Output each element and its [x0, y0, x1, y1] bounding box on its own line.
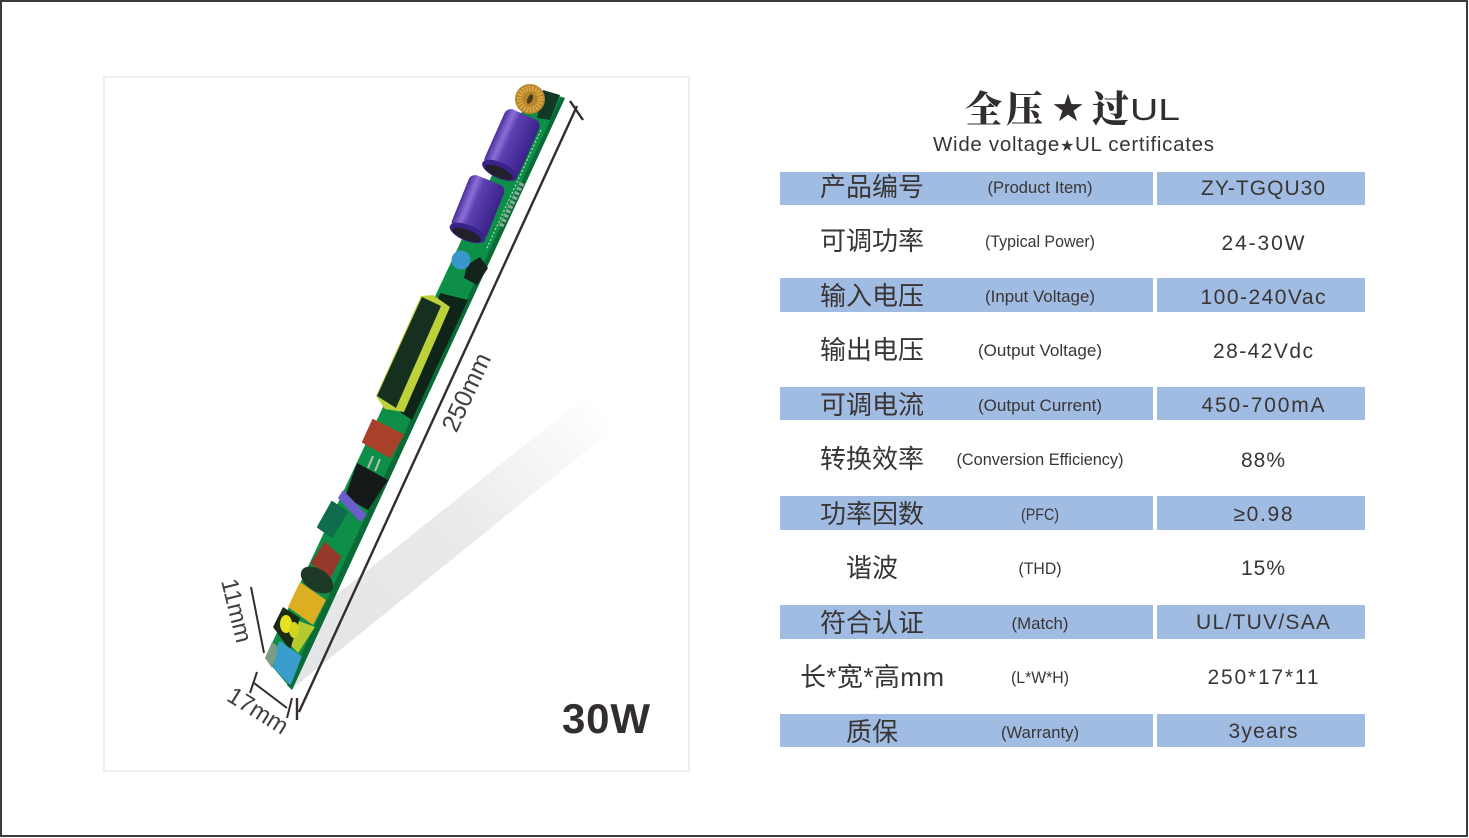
- row: dimensions: 长*宽*高mm: [800, 662, 944, 692]
- row: output voltage: 28-42Vdc: [1213, 340, 1313, 363]
- row: PFC: 功率因数: [820, 499, 924, 529]
- heading: [933, 79, 1214, 156]
- row: input voltage: 输入电压: [820, 281, 924, 311]
- row: THD: (THD): [1018, 559, 1062, 578]
- row: conversion efficiency: 转换效率: [820, 444, 924, 474]
- yellow-black inductor: [273, 607, 315, 653]
- row: output voltage: (Output Voltage): [978, 341, 1102, 360]
- heading Chinese: 全压: [965, 79, 1043, 133]
- panel: product photo: [104, 77, 689, 771]
- row: warranty: [780, 714, 1365, 747]
- row: conversion efficiency: (Conversion Efficiency): [956, 450, 1124, 469]
- grey pad corner: [265, 642, 280, 668]
- silkscreen text strip: [500, 183, 522, 228]
- dimension line: height: [251, 587, 264, 653]
- row: typical power: 24-30W: [1222, 232, 1305, 255]
- row: input voltage: 100-240Vac: [1200, 286, 1326, 309]
- floor shadow: [293, 393, 612, 688]
- row: THD: 15%: [1241, 557, 1285, 580]
- spec table: [780, 172, 1365, 747]
- row: dimensions: 250*17*11: [1208, 666, 1318, 689]
- blue safety capacitor: [275, 643, 300, 683]
- row: warranty: 质保: [846, 717, 898, 747]
- row: match: UL/TUV/SAA: [1196, 611, 1330, 634]
- dark patch by toroid: [537, 90, 560, 120]
- panel border: [104, 77, 689, 771]
- row: input voltage: (Input Voltage): [985, 287, 1095, 306]
- red film capacitor bottom: [312, 543, 340, 577]
- row: output current: 450-700mA: [1202, 394, 1324, 417]
- green capacitor: [318, 502, 347, 537]
- dimension label: 11mm: 11mm: [215, 576, 257, 645]
- row: match: (Match): [1012, 614, 1068, 633]
- dark area beside transformer: [400, 293, 468, 420]
- board surface: [265, 88, 565, 690]
- row: typical power: (Typical Power): [985, 232, 1095, 251]
- yellow box capacitor: [288, 582, 326, 625]
- row: match: [780, 605, 1365, 639]
- row: product item: ZY-TGQU30: [1201, 177, 1325, 200]
- row: conversion efficiency: 88%: [1241, 449, 1285, 472]
- row: typical power: 可调功率: [820, 226, 924, 256]
- row: PFC: [780, 496, 1365, 530]
- toroid inductor: [515, 84, 545, 114]
- heading Chinese character: 过: [1092, 79, 1129, 133]
- dimension line: width: [250, 672, 292, 718]
- dimension line: length: [297, 101, 583, 720]
- row: product item: 产品编号: [820, 172, 924, 202]
- board side edge: [287, 97, 565, 690]
- row: typical power: [820, 226, 1305, 256]
- MOSFET: [345, 456, 388, 510]
- row: output current: (Output Current): [978, 396, 1102, 415]
- red film capacitor top: [363, 420, 403, 457]
- row: dimensions: (L*W*H): [1011, 668, 1069, 687]
- blue disc capacitor small: [452, 250, 470, 270]
- silkscreen line: [486, 130, 541, 250]
- row: THD: [846, 553, 1285, 583]
- row: PFC: ≥0.98: [1234, 503, 1292, 526]
- row: warranty: (Warranty): [1001, 723, 1079, 742]
- row: output voltage: 输出电压: [820, 335, 924, 365]
- small black part: [464, 257, 488, 285]
- row: conversion efficiency: [820, 444, 1285, 474]
- purple resistor: [338, 490, 367, 522]
- row: output current: [780, 387, 1365, 420]
- row: product item: (Product Item): [988, 178, 1092, 197]
- subtitle: Wide voltage★UL certificates: [933, 133, 1214, 156]
- heading star: ★: [1051, 86, 1085, 130]
- capacitor 1: [479, 107, 542, 185]
- wattage label: 30W: [562, 695, 650, 742]
- row: PFC: (PFC): [1021, 505, 1059, 524]
- transformer: [376, 295, 450, 412]
- row: match: 符合认证: [820, 608, 924, 638]
- row: output current: 可调电流: [820, 390, 924, 420]
- dimension label: 17mm: 17mm: [222, 682, 293, 740]
- row: output voltage: [820, 335, 1313, 365]
- dimension label: 250mm: 250mm: [436, 349, 497, 436]
- heading UL: UL: [1130, 92, 1180, 127]
- choke: [296, 561, 338, 599]
- row: THD: 谐波: [846, 553, 898, 583]
- row: input voltage: [780, 278, 1365, 312]
- LED driver board: [265, 84, 565, 690]
- row: warranty: 3years: [1228, 720, 1298, 743]
- capacitor 2: [447, 173, 506, 247]
- row: product item: [780, 172, 1365, 205]
- row: dimensions: [800, 662, 1318, 692]
